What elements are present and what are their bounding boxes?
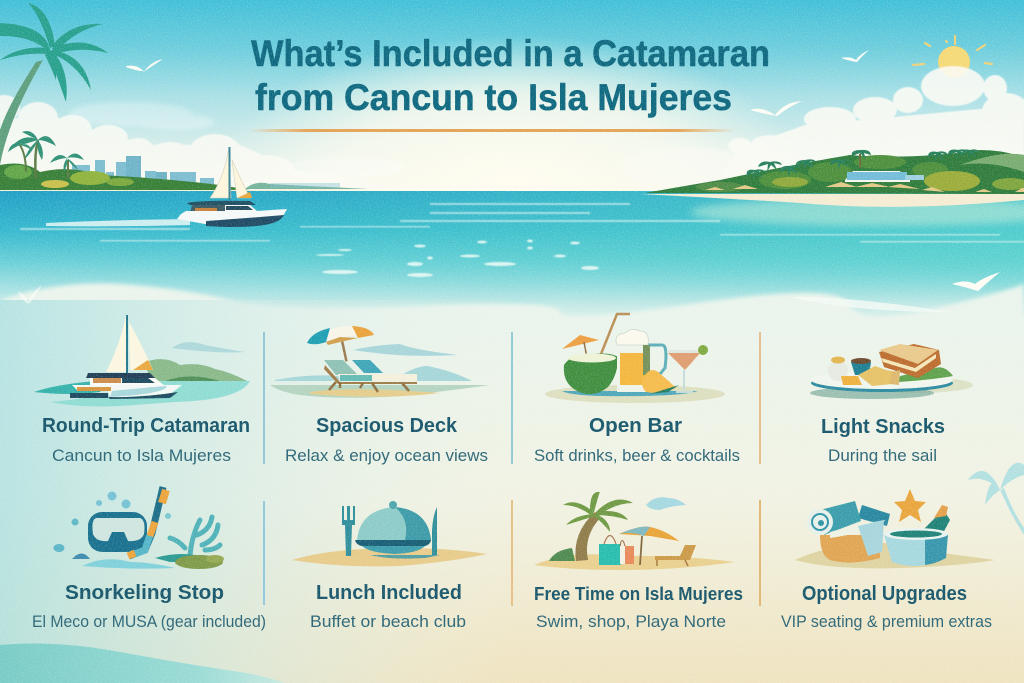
left shore: sand strip (0, 189, 370, 196)
description: Soft drinks, beer & cocktails (534, 446, 740, 465)
description: VIP seating & premium extras (781, 612, 992, 631)
palms on island (747, 149, 980, 180)
dividers row 2 (263, 500, 761, 606)
panel: lunch included (292, 501, 487, 631)
description: Cancun to Isla Mujeres (52, 446, 231, 465)
left shore: vegetation (0, 164, 250, 190)
heading: Optional Upgrades (802, 583, 967, 605)
icon: towels, star and ice bucket (795, 489, 995, 568)
heading: Open Bar (589, 415, 682, 437)
wave: bottom left water (0, 644, 285, 683)
panel: optional upgrades (781, 489, 995, 631)
icon: tropical drinks (545, 314, 725, 403)
title underline (248, 129, 736, 132)
panel: snorkeling stop (32, 487, 266, 631)
clouds: left upper haze (68, 102, 405, 178)
icon: beach palm, bags, umbrella (534, 492, 735, 570)
beach umbrellas (705, 182, 1024, 192)
right shore island (645, 149, 1024, 194)
heading: Spacious Deck (316, 415, 458, 437)
description: Swim, shop, Playa Norte (536, 612, 726, 631)
beach resort building (845, 171, 923, 180)
birds in sky (126, 50, 869, 116)
sand background (0, 282, 1024, 683)
right shore: sand strip (640, 194, 1024, 207)
heading: Snorkeling Stop (65, 582, 224, 604)
title: What’s Included in a Catamaran (251, 33, 770, 74)
panel: open bar (534, 314, 740, 465)
sea (0, 191, 1024, 321)
heading: Free Time on Isla Mujeres (534, 583, 743, 604)
description: Buffet or beach club (310, 612, 466, 631)
icon: catamaran (34, 315, 250, 406)
clouds: right (720, 66, 1024, 175)
description: Relax & enjoy ocean views (285, 446, 488, 465)
foam waves (790, 297, 950, 312)
panel: light snacks (810, 344, 973, 465)
sea sparkles (316, 240, 599, 277)
heading: Lunch Included (316, 582, 462, 604)
panel: round-trip catamaran (34, 315, 250, 465)
description: During the sail (828, 446, 937, 465)
palm silhouette: right (968, 463, 1024, 535)
panel: spacious deck (270, 326, 490, 465)
dividers row 1 (263, 332, 761, 464)
icon: cloche with cutlery (292, 501, 487, 566)
small palms (8, 131, 84, 178)
icon: mask, snorkel and coral (54, 487, 224, 569)
bird: left (18, 285, 42, 304)
catamaran on the sea (46, 147, 287, 227)
description: El Meco or MUSA (gear included) (32, 612, 266, 631)
left shore: skyline (72, 156, 368, 189)
clouds: right horizon haze (620, 148, 760, 188)
icon: beach umbrella and lounger (270, 326, 490, 398)
icon: plate with sandwich (810, 344, 973, 399)
background: sky (0, 0, 1024, 192)
bird: right (952, 272, 1000, 291)
title (251, 33, 770, 118)
large palm tree (0, 3, 108, 165)
title: from Cancun to Isla Mujeres (255, 77, 732, 118)
sun (913, 36, 992, 78)
heading: Light Snacks (821, 416, 945, 438)
clouds: left (0, 95, 400, 188)
panel: free time on isla mujeres (534, 492, 743, 631)
heading: Round-Trip Catamaran (42, 415, 250, 437)
